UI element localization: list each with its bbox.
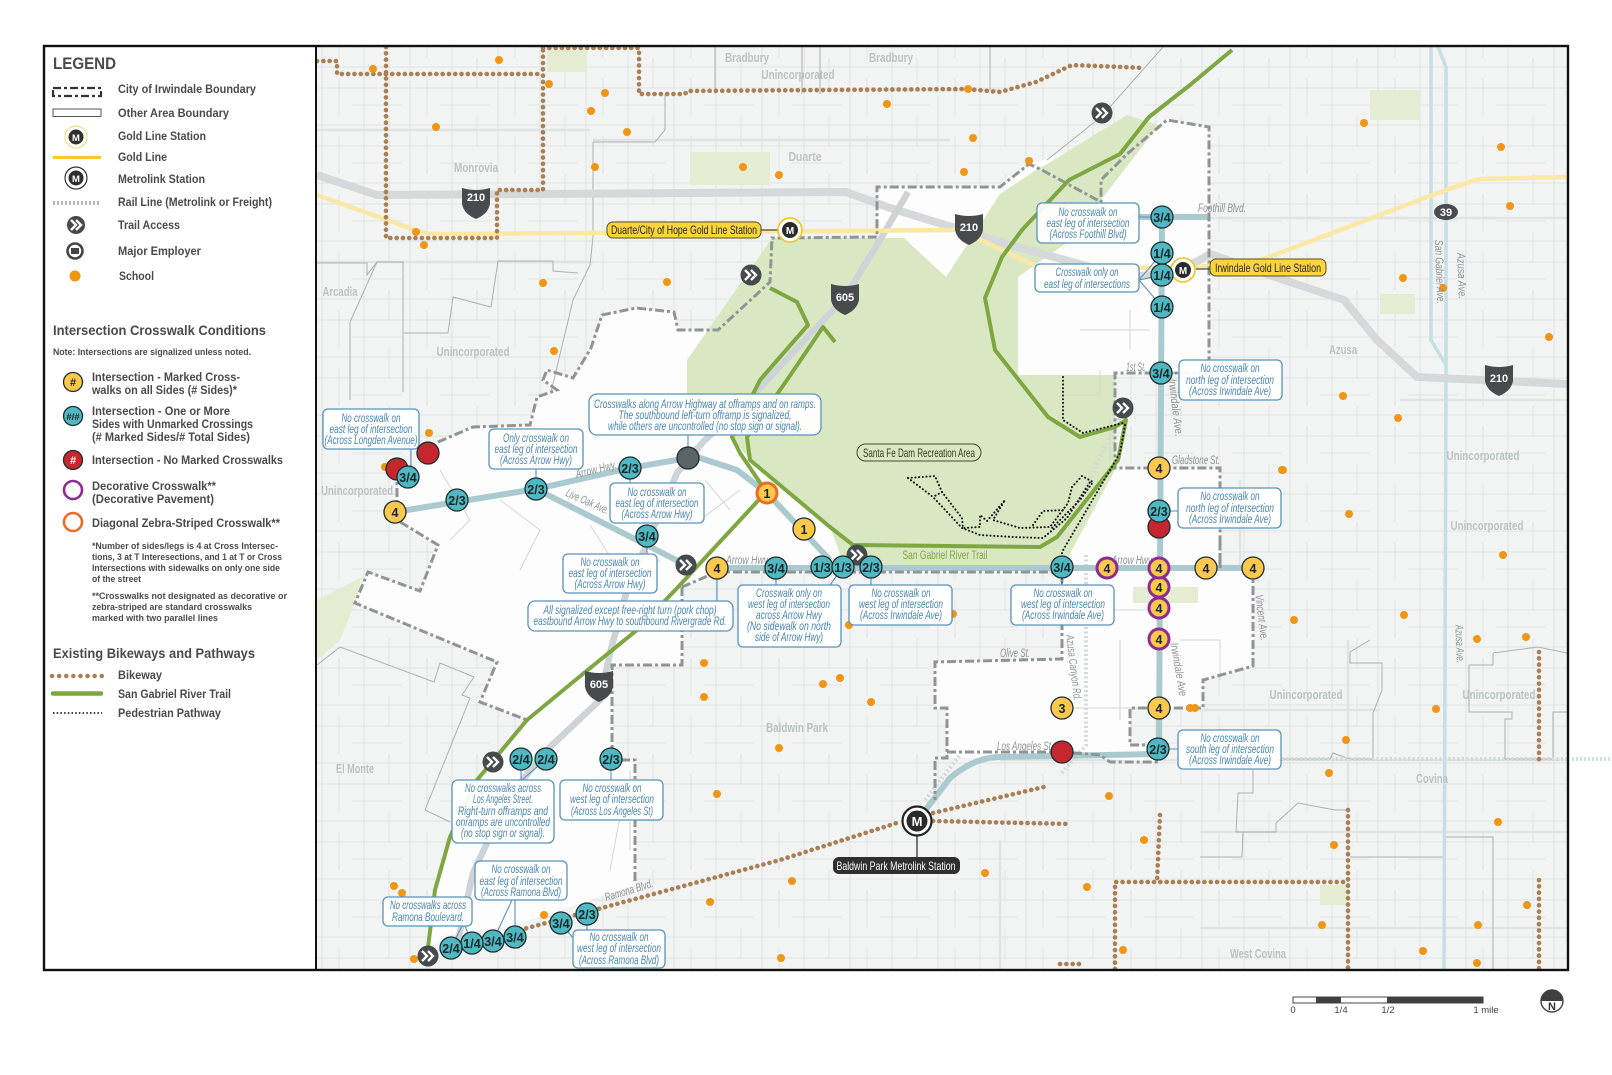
callout: across Los Angeles Street: (no stop sign or signal). [461, 826, 545, 840]
callout leader lines [411, 217, 1179, 948]
place names: Baldwin Park [766, 721, 828, 735]
place names: Bradbury [869, 51, 913, 65]
legend: diagonal zebra [64, 513, 280, 531]
heading: bikeways: Existing Bikeways and Pathways [53, 646, 255, 661]
street labels: Irwindale Ave. [1165, 378, 1184, 437]
callout: east leg Arrow Hwy lower: No crosswalk on [580, 555, 640, 569]
shield: route 39 [1434, 204, 1458, 220]
teal markers: 2/4 [442, 942, 460, 956]
place names: Covina [1416, 772, 1449, 786]
teal markers: 3/4 [552, 917, 570, 931]
callout: crosswalks along Arrow Highway [589, 394, 821, 435]
Irwindale gold line label [1196, 259, 1326, 276]
callout: crosswalks along Arrow Highway: The southbound left-turn offramp is signalized, [618, 408, 792, 422]
legend: metrolink station [65, 167, 205, 189]
callout: north leg upper: north leg of intersection [1186, 373, 1274, 387]
note: Note: Intersections are signalized unless noted. [53, 347, 251, 357]
callout: only crosswalk east leg [489, 429, 583, 469]
callout: all signalized: eastbound Arrow Hwy to southbound Rivergrade Rd. [534, 614, 726, 628]
legend: unmarked crossings [64, 406, 253, 444]
street labels: Foothill Blvd. [1198, 203, 1246, 215]
trail access icons [418, 102, 1134, 966]
teal markers [397, 206, 1173, 959]
callout: west leg Irwindale Ave left [849, 585, 952, 625]
Baldwin Park metrolink station icon: M [912, 814, 922, 829]
legend: no marked crosswalks: # [70, 455, 76, 467]
legend: gold line [53, 152, 167, 164]
place names: Unincorporated [1462, 688, 1536, 702]
callout: west leg Irwindale Ave right: west leg of intersection [1021, 597, 1105, 611]
legend: school [70, 270, 154, 283]
legend: gold line station: Gold Line Station [118, 131, 206, 143]
decorative crosswalk markers: 4 [1156, 581, 1163, 595]
Duarte gold line station icon [778, 218, 802, 242]
yellow markers: 4 [1250, 562, 1257, 576]
callout: west leg Los Angeles St: (Across Los Angeles St) [571, 804, 653, 818]
pedestrian pathways [908, 377, 1125, 590]
scale bar: 1/2 [1381, 1005, 1395, 1016]
legend: metrolink station: Metrolink Station [118, 174, 205, 186]
callout: only crosswalk east leg: east leg of intersection [494, 442, 578, 456]
callout: west leg Ramona: west leg of intersection [577, 941, 661, 955]
teal markers: 2/3 [1150, 505, 1168, 519]
freeway I-605 [457, 192, 908, 945]
yellow markers: 4 [714, 562, 721, 576]
decorative crosswalk markers: 4 [1156, 562, 1163, 576]
place names: Arcadia [322, 285, 358, 299]
legend footnotes: Intersections with sidewalks on only one side [92, 563, 280, 573]
schools [369, 56, 1553, 967]
teal markers: 3/4 [399, 471, 417, 485]
teal markers: 3/4 [506, 931, 524, 945]
decorative crosswalk markers: 4 [1156, 633, 1163, 647]
callout: across Los Angeles Street: No crosswalks across [465, 781, 541, 795]
street labels: Azusa Canyon Rd. [1063, 633, 1083, 701]
callout: north leg lower [1178, 488, 1281, 528]
callout: Longden: (Across Longden Avenue) [324, 433, 418, 447]
callout: east leg Ramona [475, 861, 567, 900]
legend: city boundary [53, 84, 257, 96]
other area boundaries [310, 47, 1567, 969]
callout: Foothill [1037, 203, 1139, 243]
major streets [317, 90, 1567, 969]
place names: Monrovia [454, 161, 499, 175]
yellow markers: 4 [1156, 702, 1163, 716]
callout: crosswalk only west leg: west leg of intersection [748, 597, 830, 611]
legend: trail access: Trail Access [118, 220, 180, 232]
panel: legend [52, 54, 287, 720]
teal markers: 2/4 [512, 753, 530, 767]
callout: south leg: south leg of intersection [1186, 742, 1274, 756]
teal markers: 3/4 [1152, 367, 1170, 381]
teal markers: 1/3 [813, 561, 831, 575]
teal markers: 1/4 [1153, 247, 1171, 261]
signal without crosswalk data [677, 447, 699, 469]
callout: across Ramona Boulevard: No crosswalks across [390, 898, 466, 912]
legend footnotes: zebra-striped are standard crosswalks [92, 602, 252, 612]
legend: marked on all sides: walks on all Sides (# Sides)* [91, 385, 237, 397]
Irwindale gold line station icon: M [1179, 266, 1187, 277]
river trail label: San Gabriel River Trail [902, 548, 988, 562]
place names: Unincorporated [762, 68, 834, 82]
decorative crosswalk markers: 4 [1156, 602, 1163, 616]
teal markers: 2/3 [527, 483, 545, 497]
legend: unmarked crossings: (# Marked Sides/# Total Sides) [92, 432, 250, 444]
callout: only crosswalk east leg: Only crosswalk on [503, 431, 569, 445]
callout: across Los Angeles Street: Right-turn offramps and [458, 804, 548, 818]
street labels [564, 203, 1468, 904]
callout: across Los Angeles Street [452, 780, 554, 843]
callout: crosswalk only west leg: across Arrow Hwy [756, 608, 823, 622]
place names: Azusa [1329, 343, 1358, 357]
city boundary dashed [355, 120, 1253, 883]
rail lines [925, 410, 1567, 800]
teal markers: 1/4 [463, 937, 481, 951]
callout: west leg Irwindale Ave right: (Across Irwindale Ave) [1022, 608, 1104, 622]
callout: west leg Irwindale Ave right [1011, 585, 1114, 625]
Irwindale gold line station icon [1171, 258, 1195, 282]
legend: major employer: Major Employer [118, 246, 201, 258]
legend: other boundary [53, 108, 230, 120]
legend footnotes: *Number of sides/legs is 4 at Cross Intersec- [92, 541, 278, 551]
legend footnotes: tions, 3 at T Interesections, and 1 at T or Cross [92, 552, 282, 562]
callout: across Los Angeles Street: Los Angeles Street. [473, 792, 533, 806]
zebra-striped intersection: 1 [764, 487, 771, 501]
place names: Unincorporated [321, 484, 393, 498]
Gold Line [317, 177, 1567, 268]
callout: east leg Arrow Hwy upper: east leg of intersection [616, 496, 699, 510]
shield: I-605 south: 605 [590, 679, 608, 691]
shield: I-210 west: 210 [467, 192, 485, 204]
red intersections [386, 442, 1170, 763]
shield: I-605 north: 605 [836, 292, 854, 304]
teal markers: 2/3 [1149, 743, 1167, 757]
Irwindale gold line label: Irwindale Gold Line Station [1215, 261, 1321, 275]
callout: east leg Ramona: No crosswalk on [492, 862, 551, 876]
teal markers: 2/4 [537, 753, 555, 767]
callout: west leg Ramona: No crosswalk on [590, 930, 649, 944]
callout: east leg of intersections: east leg of intersections [1044, 277, 1130, 291]
street labels: Arrow Hwy [1111, 555, 1153, 567]
callout: east leg Arrow Hwy upper [610, 483, 704, 523]
north arrow: N [1548, 1001, 1556, 1013]
callout: Foothill: (Across Foothill Blvd) [1050, 227, 1126, 241]
street labels: Ramona Blvd. [603, 878, 655, 904]
north arrow [1541, 990, 1563, 1013]
legend: no marked crosswalks [64, 450, 283, 470]
legend title: LEGEND [53, 54, 116, 73]
place names: Unincorporated [1270, 688, 1342, 702]
legend: unmarked crossings: Sides with Unmarked Crossings [92, 419, 253, 431]
place names: West Covina [1230, 947, 1287, 961]
shield: I-605 north [831, 284, 859, 315]
teal markers: 2/3 [448, 494, 466, 508]
place names: Unincorporated [1450, 519, 1524, 533]
decorative crosswalk markers: 4 [1104, 562, 1111, 576]
Santa Fe Dam green area [687, 115, 1159, 567]
callout: west leg Irwindale Ave right: No crosswalk on [1034, 586, 1093, 600]
callout: south leg: (Across Irwindale Ave) [1189, 753, 1271, 767]
callout: west leg Los Angeles St: west leg of intersection [570, 792, 654, 806]
legend: marked on all sides: Intersection - Marked Cross- [92, 372, 240, 384]
map panel [310, 47, 1567, 969]
callout: west leg Los Angeles St [560, 780, 663, 820]
scale bar: 1/4 [1334, 1005, 1348, 1016]
callout: only crosswalk east leg: (Across Arrow Hwy) [500, 453, 572, 467]
legend: gold line station [65, 126, 206, 148]
callout: north leg lower: north leg of intersection [1186, 501, 1274, 515]
legend: pedestrian pathway: Pedestrian Pathway [118, 708, 222, 720]
callout: north leg upper: (Across Irwindale Ave) [1189, 384, 1271, 398]
map background streets [317, 47, 1567, 969]
callout: all signalized [528, 601, 733, 631]
legend: river trail: San Gabriel River Trail [118, 689, 231, 701]
callout: crosswalk only west leg: Crosswalk only on [756, 586, 822, 600]
callout: across Ramona Boulevard [383, 897, 472, 926]
rail line continuation beyond map [1572, 757, 1612, 761]
callout: east leg Arrow Hwy lower: (Across Arrow Hwy) [574, 577, 646, 591]
callout: north leg upper: No crosswalk on [1200, 361, 1260, 375]
Baldwin Park metrolink label: Baldwin Park Metrolink Station [836, 859, 956, 873]
zebra-striped intersection [757, 483, 777, 503]
teal markers: 3/4 [1153, 211, 1171, 225]
street labels: Olive St. [1000, 648, 1030, 660]
callout: Longden: east leg of intersection [330, 422, 413, 436]
legend: bikeway [52, 670, 163, 682]
legend: diagonal zebra: Diagonal Zebra-Striped Crosswalk** [92, 518, 280, 530]
shield: I-210 east: 210 [1490, 373, 1508, 385]
city of Irwindale area [355, 120, 1253, 950]
callout: east leg Arrow Hwy lower: east leg of intersection [568, 566, 652, 580]
callout: east leg Arrow Hwy upper: No crosswalk on [628, 485, 687, 499]
legend: decorative crosswalk: Decorative Crosswalk** [92, 481, 217, 493]
callout: crosswalk only west leg: side of Arrow Hwy) [755, 630, 823, 644]
callout: north leg lower: No crosswalk on [1200, 489, 1260, 503]
callout: west leg Ramona: (Across Ramona Blvd) [579, 953, 659, 967]
legend: decorative crosswalk [64, 481, 217, 506]
callout: west leg Los Angeles St: No crosswalk on [582, 781, 642, 795]
teal markers: 1/4 [1153, 269, 1171, 283]
freeway I-210 [317, 175, 1567, 384]
place names [321, 51, 1536, 961]
shield: I-210 west [462, 188, 490, 219]
street labels: Live Oak Ave. [564, 487, 611, 517]
callout: east leg of intersections: Crosswalk only on [1056, 265, 1119, 279]
street labels: 1st St. [1126, 362, 1146, 374]
callout: across Ramona Boulevard: Ramona Boulevard. [392, 910, 464, 924]
callout: Foothill: No crosswalk on [1058, 205, 1118, 219]
yellow markers: 4 [1156, 462, 1163, 476]
legend footnotes: of the street [92, 574, 141, 584]
callout: Longden [323, 409, 419, 449]
arterial roads [395, 217, 1253, 821]
callout: west leg Irwindale Ave left: west leg of intersection [859, 597, 943, 611]
Duarte gold line station icon: M [786, 226, 794, 237]
callout: Foothill: east leg of intersection [1046, 216, 1130, 230]
street labels: Gladstone St. [1172, 455, 1220, 467]
intersection markers [384, 206, 1264, 959]
legend: major employer [68, 244, 201, 258]
callout: south leg: No crosswalk on [1200, 731, 1260, 745]
teal markers: 3/4 [767, 562, 785, 576]
callout: east leg Ramona: (Across Ramona Blvd) [481, 885, 561, 899]
legend footnotes: marked with two parallel lines [92, 613, 218, 623]
shield: route 39: 39 [1440, 207, 1452, 219]
callout: across Los Angeles Street: onramps are uncontrolled [456, 815, 550, 829]
callout: west leg Ramona [573, 930, 665, 968]
legend: unmarked crossings: #/# [66, 412, 80, 423]
yellow markers: 3 [1059, 702, 1066, 716]
teal markers: 2/3 [578, 908, 596, 922]
place names: Unincorporated [436, 345, 510, 359]
callout: east leg Ramona: east leg of intersection [480, 874, 563, 888]
teal markers: 3/4 [1053, 561, 1071, 575]
place names: Bradbury [725, 51, 769, 65]
street labels: Vincent Ave. [1252, 594, 1270, 641]
callout: all signalized: All signalized except free-right turn (pork chop) [543, 603, 716, 617]
callout: north leg lower: (Across Irwindale Ave) [1189, 512, 1271, 526]
bikeways [317, 47, 1539, 969]
teal markers: 1/3 [834, 561, 852, 575]
teal markers: 2/3 [621, 462, 639, 476]
shield: I-210 center [955, 214, 983, 245]
shield: I-605 south [585, 671, 613, 702]
legend: gold line: Gold Line [118, 152, 167, 164]
callout: west leg Irwindale Ave left: (Across Irwindale Ave) [860, 608, 942, 622]
legend: gold line station: M [72, 133, 80, 144]
shield: I-210 center: 210 [960, 222, 978, 234]
small parks [317, 50, 1420, 905]
legend: other boundary: Other Area Boundary [118, 108, 230, 120]
callout: crosswalks along Arrow Highway: while others are uncontrolled (no stop sign or signal). [608, 419, 802, 433]
callout: crosswalk only west leg: (No sidewalk on north [747, 619, 831, 633]
callout: west leg Irwindale Ave left: No crosswalk on [872, 586, 931, 600]
legend: marked on all sides [64, 372, 240, 397]
legend: marked on all sides: # [70, 377, 76, 389]
callout: east leg Arrow Hwy lower [563, 554, 657, 593]
legend: bikeway: Bikeway [118, 670, 163, 682]
legend: decorative crosswalk: (Decorative Pavement) [92, 494, 214, 506]
place names: Unincorporated [1446, 449, 1520, 463]
street labels: Azusa Ave. [1454, 252, 1468, 299]
scale bar: 0 [1290, 1005, 1296, 1016]
teal markers: 1/4 [1153, 301, 1171, 315]
street labels: Irwindale Ave [1167, 642, 1189, 697]
legend footnotes [92, 541, 287, 623]
decorative crosswalk markers [1097, 558, 1169, 649]
San Gabriel River Trail [427, 50, 1232, 956]
callout: east leg Arrow Hwy upper: (Across Arrow Hwy) [622, 507, 692, 521]
street labels: Arrow Hwy. [574, 459, 618, 481]
street labels: Arrow Hwy [725, 555, 769, 567]
yellow markers: 4 [1203, 562, 1210, 576]
yellow markers: 4 [392, 506, 399, 520]
legend: trail access [67, 216, 180, 234]
teal markers: 3/4 [638, 530, 656, 544]
callout: east leg of intersections [1035, 264, 1139, 292]
Duarte gold line label: Duarte/City of Hope Gold Line Station [611, 223, 757, 237]
teal markers: 3/4 [484, 935, 502, 949]
place names: El Monte [336, 762, 374, 776]
scale bar: 1 mile [1473, 1005, 1499, 1016]
teal markers: 2/3 [862, 561, 880, 575]
callout: north leg upper [1179, 360, 1282, 400]
legend: rail line: Rail Line (Metrolink or Freight) [118, 197, 272, 209]
recreation area label [857, 444, 981, 461]
callout: Longden: No crosswalk on [342, 411, 401, 425]
Baldwin Park metrolink label [833, 836, 960, 874]
callout: south leg [1178, 730, 1281, 769]
streets in Irwindale area [440, 310, 1220, 870]
recreation area label: Santa Fe Dam Recreation Area [863, 446, 975, 460]
scale bar [1290, 997, 1499, 1016]
legend: school: School [119, 271, 154, 283]
callout: crosswalk only west leg [738, 585, 841, 647]
Baldwin Park metrolink station icon [902, 806, 932, 836]
street labels: San Gabriel Ave. [1432, 240, 1446, 304]
place names: Duarte [788, 150, 822, 164]
callout: crosswalks along Arrow Highway: Crosswalks along Arrow Highway at offramps and on ramps. [594, 397, 816, 411]
shield: I-210 east [1485, 365, 1513, 396]
street labels: Azusa Ave. [1452, 624, 1466, 663]
yellow markers: 1 [801, 523, 808, 537]
legend footnotes: **Crosswalks not designated as decorative or [92, 591, 287, 601]
legend: unmarked crossings: Intersection - One or More [92, 406, 230, 418]
legend: no marked crosswalks: Intersection - No Marked Crosswalks [92, 455, 283, 467]
legend: metrolink station: M [72, 174, 80, 185]
street labels: Los Angeles St [997, 741, 1052, 753]
teal markers: 2/3 [602, 753, 620, 767]
river channels [1431, 47, 1446, 969]
yellow markers [384, 457, 1264, 719]
heading: crosswalk conditions: Intersection Crosswalk Conditions [53, 323, 266, 338]
legend: city boundary: City of Irwindale Boundary [118, 84, 257, 96]
